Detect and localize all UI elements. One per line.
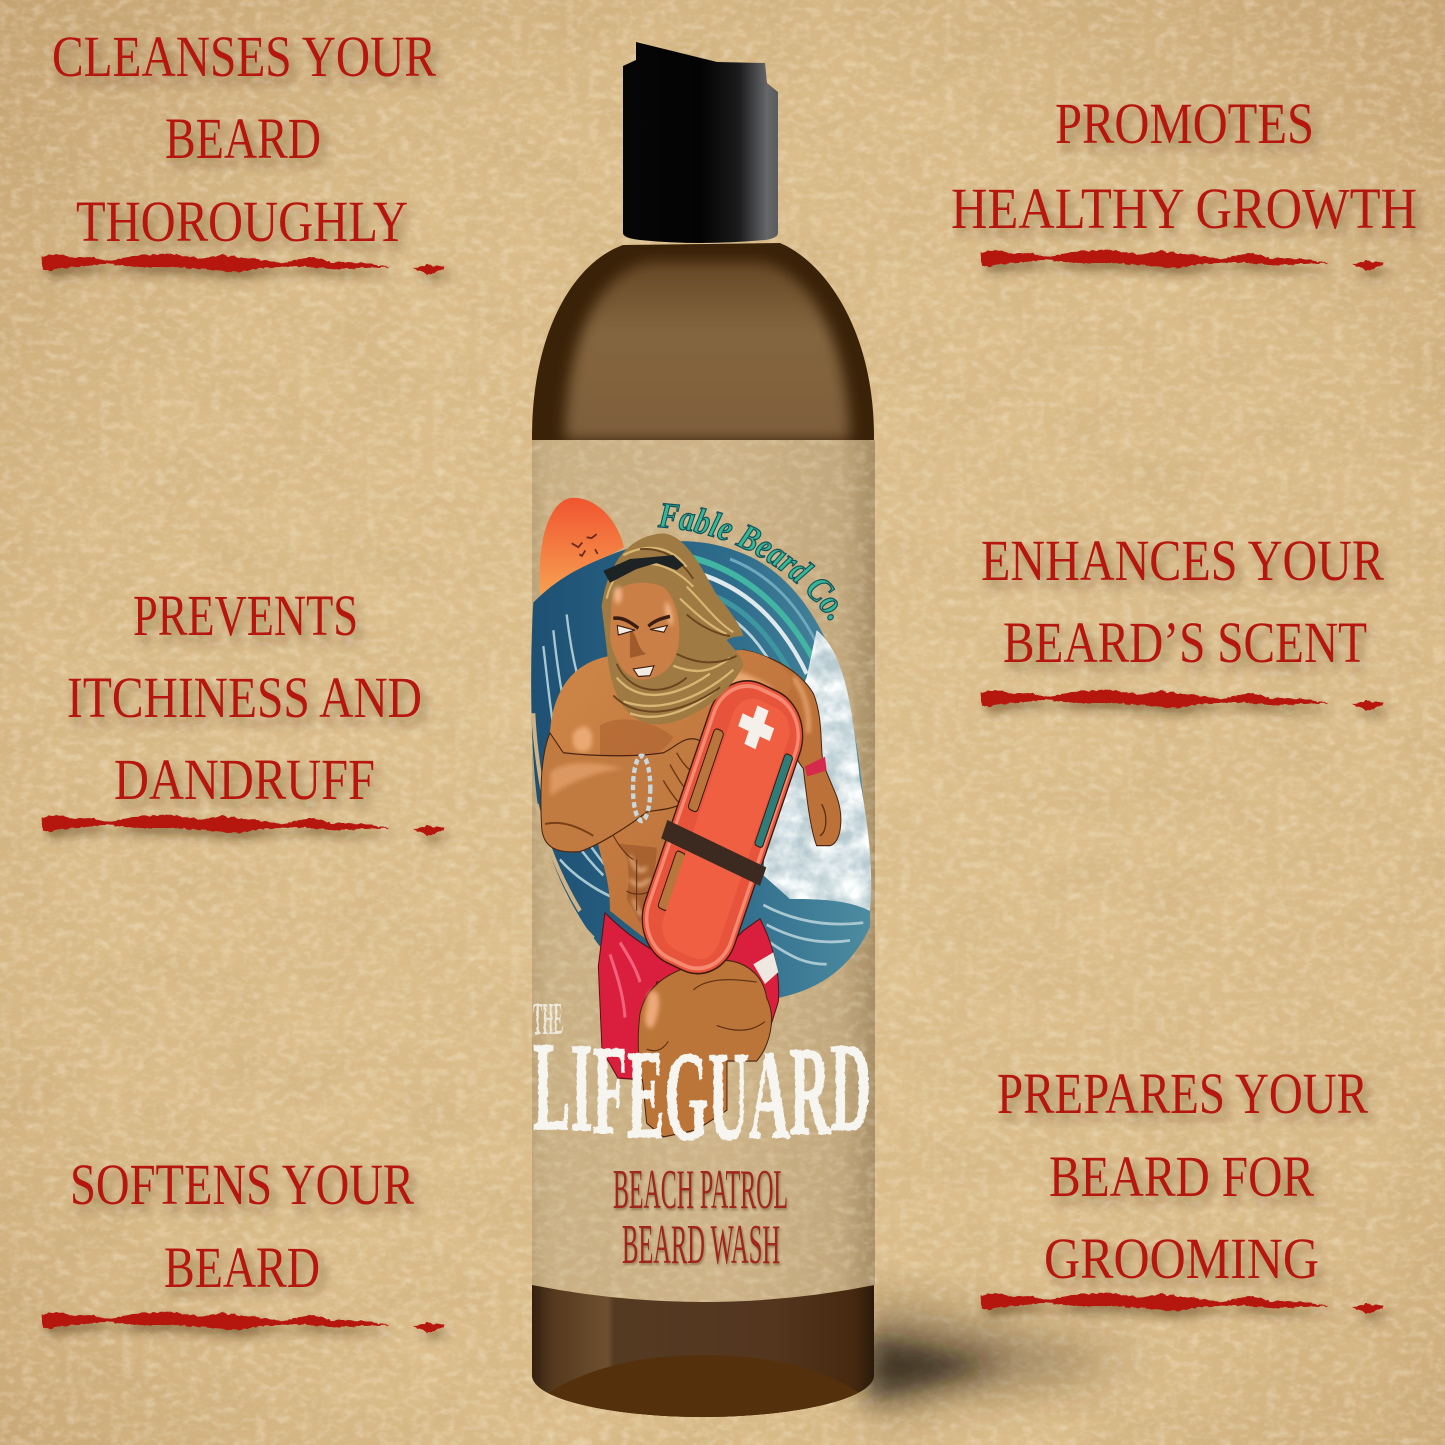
- stripe on shorts: [753, 952, 778, 984]
- eyes and mouth: [617, 625, 667, 676]
- product bottle: BEARD WASH: [622, 1214, 780, 1276]
- face: [610, 583, 679, 680]
- benefit: promotes healthy growth: [951, 91, 1417, 270]
- bottle body: [525, 235, 885, 1425]
- product type: [613, 1159, 788, 1276]
- bottle cap: [623, 42, 778, 243]
- benefit: prevents itchiness and dandruff: DANDRUFF: [114, 747, 375, 812]
- brand name on arc: Fable Beard Co.: [657, 502, 838, 620]
- bracelet: [633, 756, 650, 821]
- benefit: promotes healthy growth: PROMOTES: [1055, 91, 1314, 156]
- benefit: enhances your beard's scent: BEARD’S SCENT: [1003, 610, 1367, 675]
- benefit: softens your beard: BEARD: [164, 1235, 320, 1300]
- liquid in base: [545, 1355, 862, 1420]
- wave: [531, 541, 871, 998]
- sunglasses: [603, 555, 684, 583]
- right arm: [743, 650, 841, 846]
- benefit: prepares your beard for grooming: PREPARES YOUR: [997, 1061, 1368, 1126]
- product label: [532, 440, 875, 1320]
- foam: [763, 630, 871, 911]
- wave stripes: [543, 614, 863, 964]
- rescue buoy: [626, 664, 819, 990]
- product name: THE: [533, 993, 563, 1044]
- benefit: softens your beard: [42, 1152, 444, 1332]
- bent arm and fist: [541, 733, 709, 852]
- sun with birds: [540, 498, 624, 595]
- leg: [638, 960, 771, 1137]
- product bottle: [531, 42, 875, 1417]
- benefit: prevents itchiness and dandruff: PREVENTS: [133, 583, 358, 648]
- torso: [550, 650, 793, 943]
- benefit: enhances your beard's scent: [981, 528, 1384, 710]
- floor shadow of bottle: [868, 1300, 1140, 1412]
- watch band: [805, 757, 827, 776]
- bottle base: [532, 1280, 874, 1420]
- benefit: cleanses your beard thoroughly: BEARD: [165, 106, 321, 171]
- benefit: cleanses your beard thoroughly: THOROUGHLY: [76, 189, 408, 254]
- benefit: prevents itchiness and dandruff: [42, 583, 444, 835]
- label illustration: lifeguard and wave: [531, 498, 871, 1137]
- product name: LIFEGUARD: [533, 1017, 871, 1167]
- benefit: prepares your beard for grooming: BEARD FOR: [1049, 1144, 1314, 1209]
- benefit: prepares your beard for grooming: GROOMING: [1044, 1226, 1319, 1291]
- shorts: [598, 913, 779, 1080]
- benefit: cleanses your beard thoroughly: CLEANSES YOUR: [52, 24, 436, 89]
- benefit: prevents itchiness and dandruff: ITCHINESS AND: [67, 665, 422, 730]
- benefit: softens your beard: SOFTENS YOUR: [70, 1152, 414, 1217]
- benefit: cleanses your beard thoroughly: [42, 24, 444, 274]
- benefit: prepares your beard for grooming: [981, 1061, 1383, 1313]
- product bottle: BEACH PATROL: [613, 1159, 788, 1221]
- chest and abdominal shading: [573, 666, 773, 923]
- beard and hair: [602, 533, 743, 724]
- wave streaks against the label: [533, 713, 593, 939]
